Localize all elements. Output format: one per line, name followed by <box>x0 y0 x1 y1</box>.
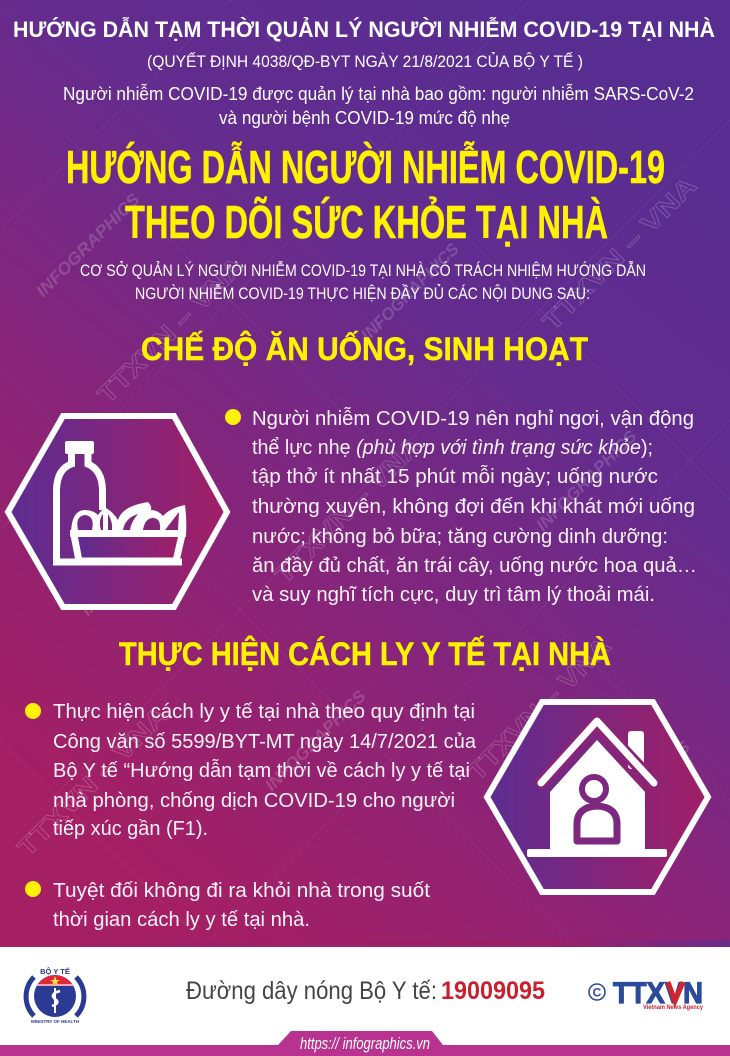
watermarks: INFOGRAPHICS <box>261 686 370 795</box>
watermarks: TTXVN – VNA <box>92 252 250 409</box>
bullet text: isolation rules <box>25 701 477 840</box>
logo: Ministry of Health: BỘ Y TẾ <box>40 966 70 976</box>
bullet text: stay at home: thời gian cách ly y tế tại nhà. <box>53 909 310 931</box>
bullet text: isolation rules: nhà phòng, chống dịch COVID-19 cho người <box>53 790 455 812</box>
panel: footer <box>0 947 730 1056</box>
watermarks: TTXVN – VNA <box>537 171 702 336</box>
logo: TTXVN: TTXVN <box>613 977 703 1010</box>
bullet text: diet and lifestyle <box>225 407 697 606</box>
watermarks: INFOGRAPHICS <box>32 189 144 301</box>
icon: person in house in hexagon <box>487 702 708 892</box>
heading: diet and lifestyle: CHẾ ĐỘ ĂN UỐNG, SINH HOẠT <box>141 331 588 367</box>
bullet text: diet and lifestyle: Người nhiễm COVID-19 nên nghỉ ngơi, vận động <box>252 407 694 430</box>
bullet text: stay at home: Tuyệt đối không đi ra khỏi nhà trong suốt <box>53 880 430 902</box>
main heading <box>66 141 665 248</box>
website footer bar: https:// infographics.vn <box>300 1034 430 1053</box>
intro text: Người nhiễm COVID-19 được quản lý tại nhà bao gồm: người nhiễm SARS-CoV-2 <box>63 83 694 104</box>
logo: TTXVN: C <box>593 986 602 1000</box>
top edge stripe of footer <box>0 940 730 947</box>
intro text: và người bệnh COVID-19 mức độ nhẹ <box>219 108 510 128</box>
bullet text: stay at home <box>25 880 430 931</box>
hotline: Đường dây nóng Bộ Y tế: <box>186 977 437 1005</box>
watermarks: TTXVN – VNA <box>462 632 617 786</box>
responsibility note <box>80 261 646 303</box>
icon: bottle and food basket in hexagon <box>8 416 227 607</box>
bullet text: isolation rules: tiếp xúc gần (F1). <box>53 818 208 840</box>
intro text <box>63 83 694 128</box>
watermarks: TTXVN – VNA <box>269 432 427 589</box>
watermarks <box>12 171 702 862</box>
bullet text: diet and lifestyle: tập thở ít nhất 15 phút mỗi ngày; uống nước <box>252 465 658 488</box>
responsibility note: NGƯỜI NHIỄM COVID-19 THỰC HIỆN ĐẦY ĐỦ CÁC NỘI DUNG SAU: <box>135 284 590 303</box>
bullet text: diet and lifestyle: nước; không bỏ bữa; tăng cường dinh dưỡng: <box>252 526 668 548</box>
hotline: 19009095 <box>441 977 545 1005</box>
bullet text: diet and lifestyle: thể lực nhẹ (phù hợp với tình trạng sức khỏe); <box>252 437 653 459</box>
subtitle: decision reference: (QUYẾT ĐỊNH 4038/QĐ-BYT NGÀY 21/8/2021 CỦA BỘ Y TẾ ) <box>147 52 583 71</box>
watermarks: INFOGRAPHICS <box>584 737 694 847</box>
bullet text: diet and lifestyle: ăn đầy đủ chất, ăn trái cây, uống nước hoa quả… <box>252 555 697 577</box>
bullet text: isolation rules: Thực hiện cách ly y tế tại nhà theo quy định tại <box>53 701 475 723</box>
bullet text: diet and lifestyle: thường xuyên, không đợi đến khi khát mới uống <box>252 496 695 518</box>
logo: Ministry of Health <box>26 966 84 1024</box>
bullet text: isolation rules: Công văn số 5599/BYT-MT ngày 14/7/2021 của <box>53 731 477 753</box>
watermarks: INFOGRAPHICS <box>77 511 186 620</box>
heading: home medical isolation: THỰC HIỆN CÁCH LY Y TẾ TẠI NHÀ <box>119 636 611 672</box>
bullet text: diet and lifestyle: và suy nghĩ tích cực, duy trì tâm lý thoải mái. <box>252 584 655 606</box>
logo: TTXVN: Vietnam News Agency <box>643 1004 703 1011</box>
website footer bar <box>0 1031 730 1056</box>
watermarks: TTXVN – VNA <box>12 701 174 862</box>
bullet text: isolation rules: Bộ Y tế “Hướng dẫn tạm thời về cách ly y tế tại <box>53 759 470 782</box>
logo: Ministry of Health: MINISTRY OF HEALTH <box>31 1019 79 1024</box>
title: HƯỚNG DẪN TẠM THỜI QUẢN LÝ NGƯỜI NHIỄM COVID-19 TẠI NHÀ <box>13 16 715 42</box>
watermarks: INFOGRAPHICS <box>357 239 463 345</box>
watermarks: INFOGRAPHICS <box>532 426 641 535</box>
